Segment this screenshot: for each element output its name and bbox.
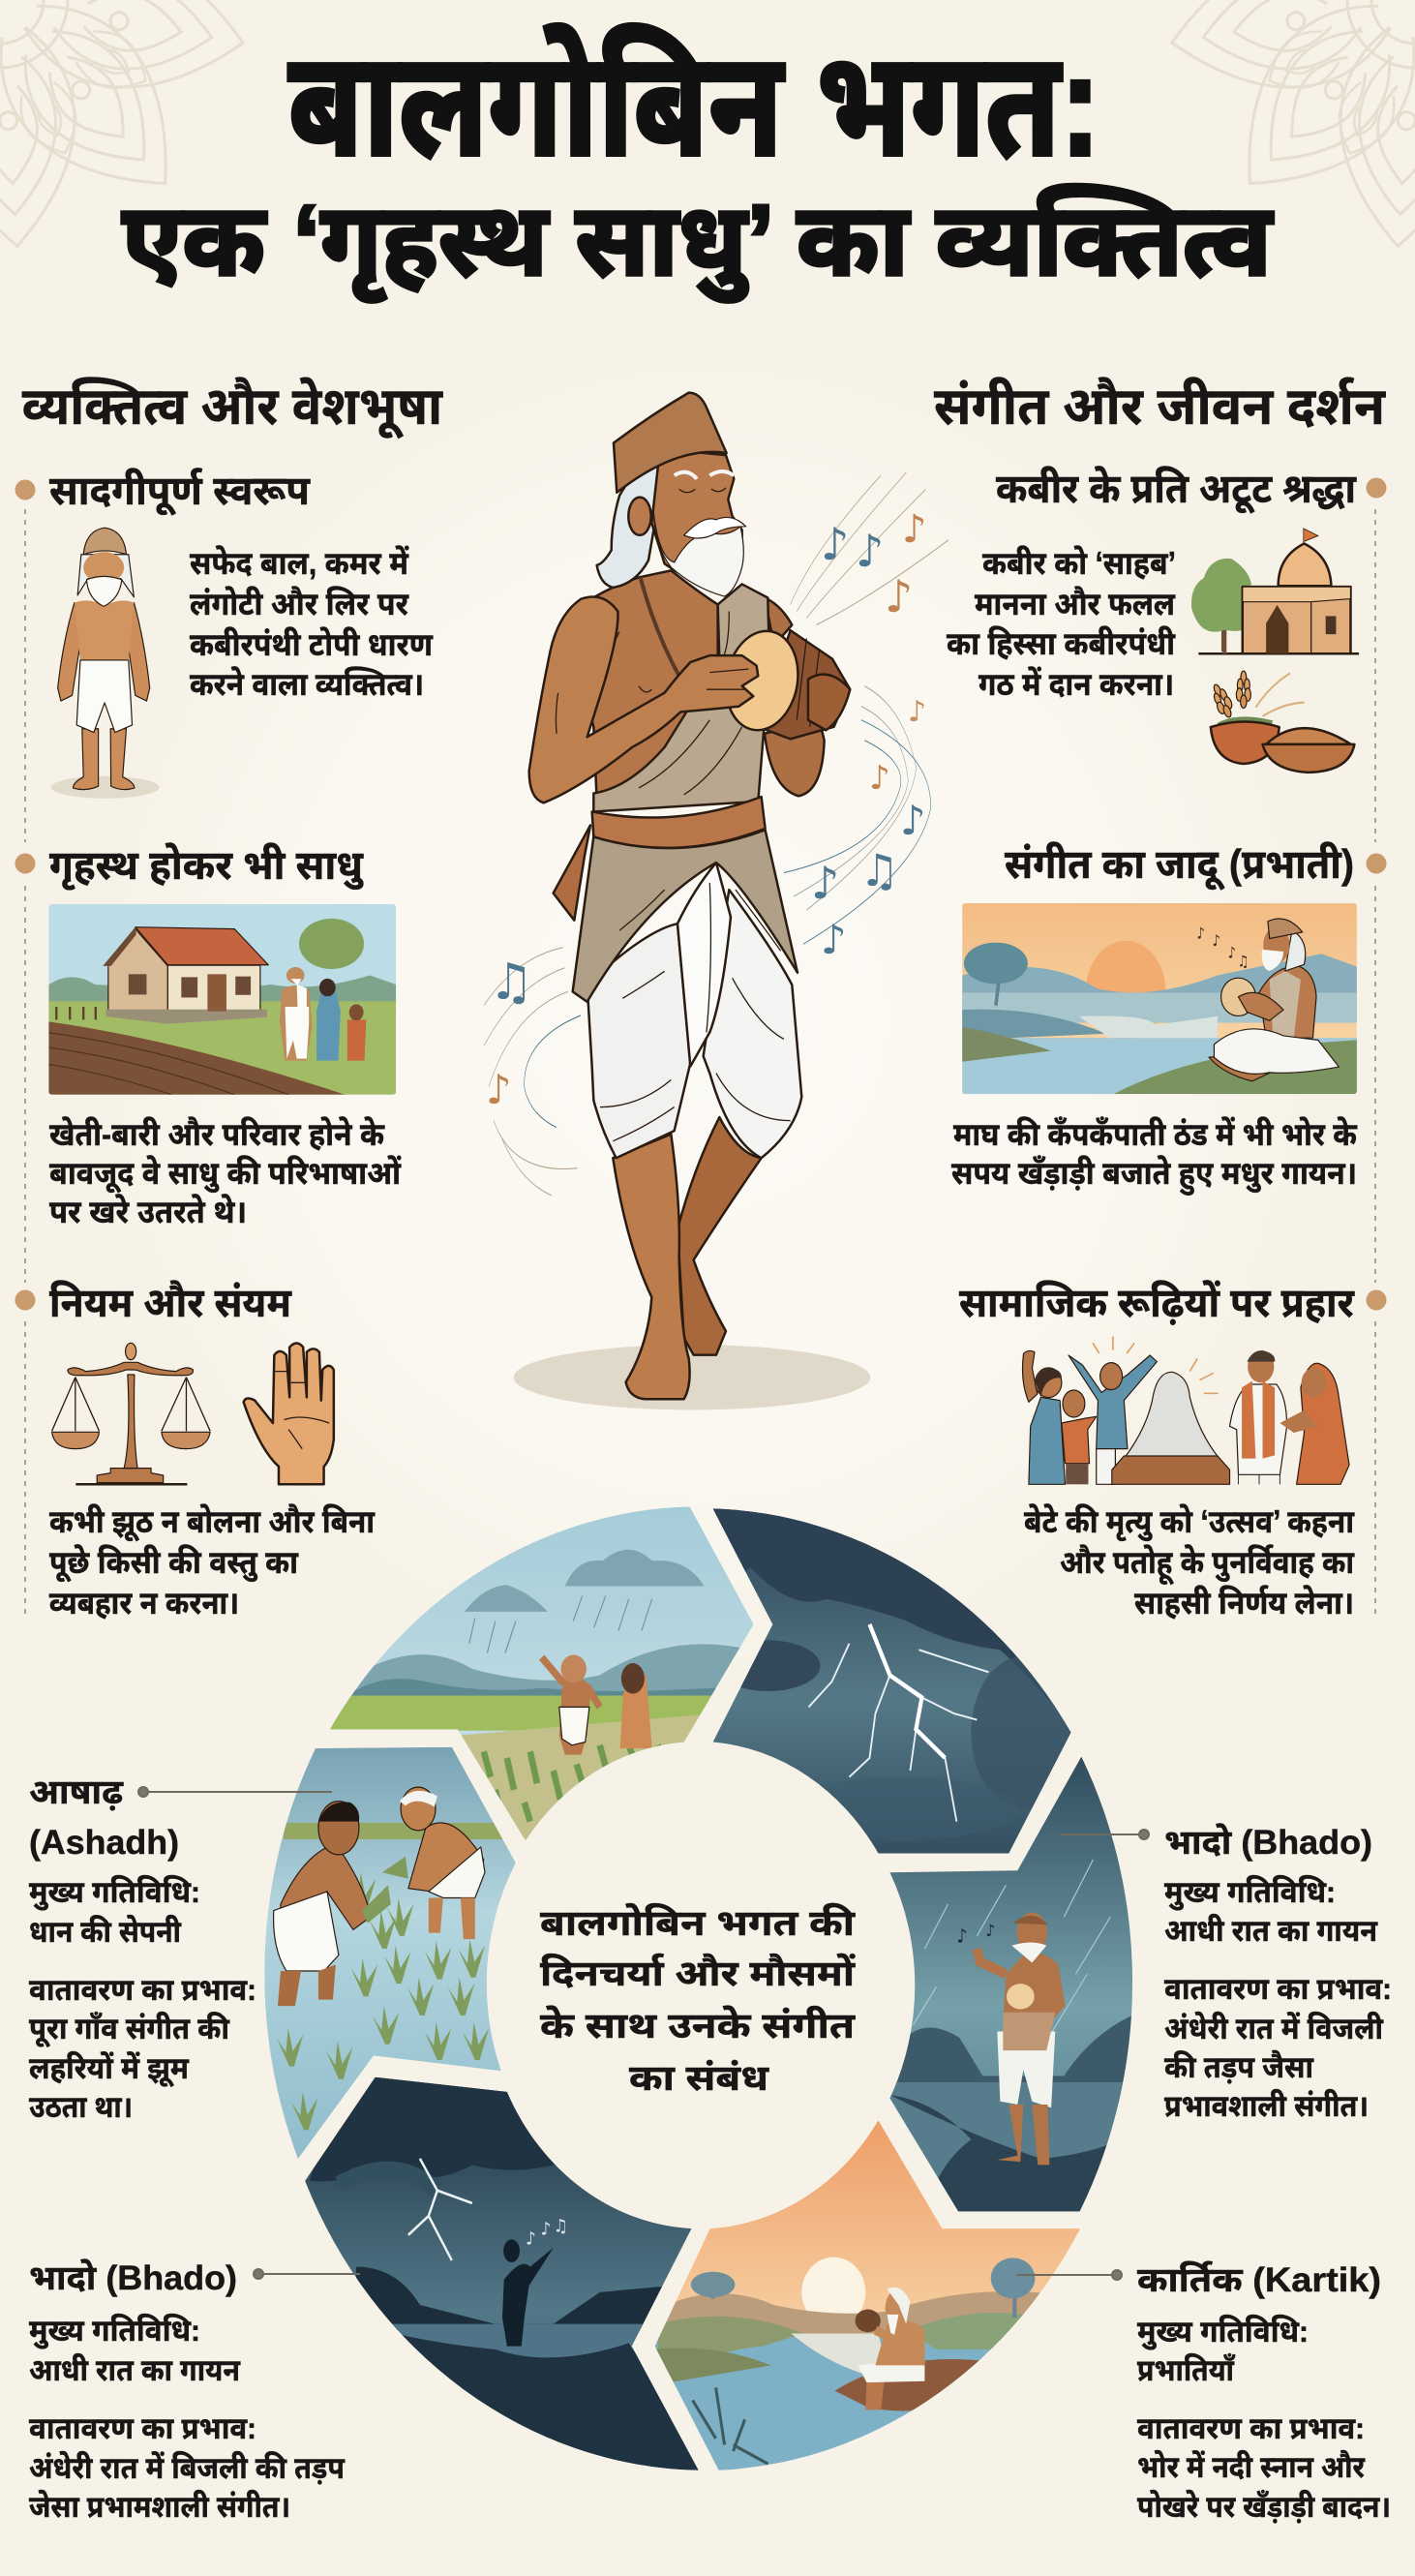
- text: householder sage: [49, 1115, 402, 1229]
- label: Ashadh: लहरियों में झूम: [29, 2051, 190, 2087]
- heading: music column: संगीत और जीवन दर्शन: [934, 377, 1387, 436]
- music notes around figure: ♪: [811, 857, 839, 909]
- label: Bhado right: मुख्य गतिविधि:: [1164, 1875, 1336, 1911]
- drum: [723, 621, 850, 740]
- wheel centre text: के साथ उनके संगीत: [540, 2005, 856, 2046]
- label: Bhado right: की तड़प जैसा: [1164, 2050, 1314, 2084]
- label: Bhado left: [29, 2258, 346, 2524]
- label: Bhado left: अंधेरी रात में बिजली की तड़प: [29, 2451, 346, 2485]
- text: magic of music: माघ की कँपकँपाती ठंड में भी भोर के: [953, 1115, 1358, 1152]
- icon: scales and raised hand: [52, 1343, 334, 1484]
- music notes around figure: ♪: [869, 759, 890, 798]
- text: devotion to Kabir: [947, 545, 1176, 702]
- label: Bhado right: भादो (Bhado): [1164, 1823, 1372, 1862]
- label: Kartik: वातावरण का प्रभाव:: [1137, 2411, 1365, 2445]
- label: Ashadh: उठता था।: [29, 2090, 133, 2124]
- label: Bhado left: मुख्य गतिविधि:: [29, 2314, 200, 2349]
- face: [651, 452, 742, 594]
- label: Bhado right: वातावरण का प्रभाव:: [1164, 1972, 1392, 2006]
- leader lines: [138, 1787, 1149, 2280]
- label: Kartik: कार्तिक (Kartik): [1137, 2260, 1381, 2299]
- segment: midnight singer: [884, 1751, 1139, 2216]
- wheel centre text: का संबंध: [629, 2058, 770, 2098]
- label: Bhado right: आधी रात का गायन: [1164, 1914, 1378, 1948]
- beard: [653, 509, 743, 596]
- music notes around figure: ♫: [489, 954, 534, 1012]
- label: Ashadh: धान की सेपनी: [29, 1915, 182, 1949]
- wheel centre text: [540, 1902, 856, 2098]
- mandala top left: [0, 0, 255, 251]
- label: Bhado left: भादो (Bhado): [29, 2258, 237, 2297]
- sacred bead necklace: [641, 577, 679, 676]
- left timeline: [15, 480, 35, 1614]
- text: simple appearance: लंगोटी और लिर पर: [190, 586, 409, 621]
- sash: [592, 797, 766, 848]
- subheading: magic of music: संगीत का जादू (प्रभाती): [1005, 841, 1354, 891]
- text: rules and restraint: व्यबहार न करना।: [48, 1585, 239, 1621]
- music notes around figure: ♫: [859, 844, 899, 896]
- music notes around figure: ♪: [486, 1066, 512, 1113]
- subheading: attack on social customs: सामाजिक रूढ़ियों पर प्रहार: [959, 1280, 1355, 1325]
- label: Kartik: मुख्य गतिविधि:: [1137, 2315, 1309, 2350]
- music notes around figure: ♪: [900, 797, 926, 844]
- label: Ashadh: वातावरण का प्रभाव:: [29, 1973, 256, 2007]
- seasonal wheel: [260, 1491, 1139, 2483]
- text: rules and restraint: पूछे किसी की वस्तु का: [49, 1543, 299, 1583]
- mandala top right: [1160, 0, 1415, 251]
- icon: temple and tree: [1191, 529, 1359, 653]
- text: devotion to Kabir: मानना और फलल: [975, 586, 1176, 621]
- music notes around figure: ♪: [885, 570, 913, 622]
- label: Ashadh: पूरा गाँव संगीत की: [29, 2012, 230, 2047]
- wheel centre text: बालगोबिन भगत की: [540, 1902, 856, 1943]
- icon: standing sage: [51, 528, 159, 799]
- segment: night singer silhouette: ♫: [554, 2217, 568, 2237]
- back leg: [677, 1117, 762, 1355]
- music notes around figure: ♪: [821, 916, 847, 963]
- segment: rice transplanting: [260, 1745, 522, 2165]
- label: Ashadh: मुख्य गतिविधि:: [29, 1875, 200, 1911]
- text: simple appearance: [190, 544, 434, 702]
- text: magic of music: [951, 1115, 1358, 1196]
- text: householder sage: बावजूद वे साधु की परिभाषाओं: [49, 1154, 402, 1194]
- music notes around figure: ♪: [821, 518, 849, 570]
- text: simple appearance: करने वाला व्यक्तित्व।: [190, 665, 424, 702]
- text: simple appearance: सफेद बाल, कमर में: [190, 544, 409, 581]
- text: devotion to Kabir: गठ में दान करना।: [978, 666, 1174, 702]
- title: [122, 23, 1274, 302]
- subheading: simple appearance: सादगीपूर्ण स्वरूप: [49, 468, 311, 516]
- segment: lightning storm: [712, 1508, 1070, 1853]
- seated sage: ♪: [1197, 924, 1205, 943]
- right timeline: [1367, 478, 1386, 1614]
- text: attack on social customs: [1024, 1502, 1355, 1621]
- seated sage: [1197, 919, 1339, 1081]
- label: Ashadh: [29, 1773, 256, 2124]
- icon: grain offering: [1209, 671, 1354, 773]
- hair: [597, 464, 660, 588]
- segment: midnight singer: ♪: [985, 1921, 995, 1940]
- label: Bhado right: अंधेरी रात में विजली: [1164, 2012, 1384, 2046]
- label: Bhado left: आधी रात का गायन: [29, 2353, 241, 2387]
- upper cloth: [593, 584, 769, 811]
- text: rules and restraint: कभी झूठ न बोलना और बिना: [49, 1503, 376, 1542]
- text: magic of music: सपय खँड़ाड़ी बजाते हुए मधुर गायन।: [951, 1154, 1357, 1196]
- segment: night singer silhouette: [305, 2077, 699, 2470]
- seated sage: ♪: [1228, 944, 1236, 962]
- heading: personality column: व्यक्तित्व और वेशभूषा: [21, 377, 443, 439]
- segment: rain over fields: [330, 1506, 753, 1841]
- label: Ashadh: आषाढ़: [29, 1773, 124, 1811]
- title: एक ‘गृहस्थ साधु’ का व्यक्तित्व: [122, 184, 1274, 302]
- segment: midnight singer: ♪: [956, 1925, 968, 1948]
- music notes around figure: ♪: [856, 525, 884, 577]
- label: Bhado right: [1164, 1823, 1392, 2123]
- far shoulder and forearm: [765, 597, 825, 796]
- text: householder sage: पर खरे उतरते थे।: [49, 1193, 247, 1229]
- label: Ashadh: (Ashadh): [29, 1824, 179, 1862]
- segment: dawn river: [652, 2114, 1087, 2483]
- seated sage: ♪: [1213, 932, 1220, 951]
- title: बालगोबिन भगत:: [288, 23, 1100, 186]
- near arm and hand: [529, 596, 758, 803]
- text: attack on social customs: बेटे की मृत्यु को ‘उत्सव’ कहना: [1024, 1502, 1355, 1542]
- label: Bhado left: जेसा प्रभामशाली संगीत।: [29, 2490, 290, 2524]
- text: attack on social customs: साहसी निर्णय लेना।: [1134, 1584, 1354, 1621]
- segment: night singer silhouette: ♪: [526, 2229, 536, 2250]
- dhoti: [587, 863, 801, 1158]
- lower cloth: [573, 830, 798, 1002]
- music notes around figure: [486, 507, 927, 1113]
- front leg: [613, 1135, 690, 1399]
- text: devotion to Kabir: का हिस्सा कबीरपंधी: [947, 625, 1176, 661]
- label: Kartik: प्रभातियाँ: [1137, 2353, 1236, 2387]
- text: householder sage: खेती-बारी और परिवार होने के: [49, 1115, 385, 1152]
- text: simple appearance: कबीरपंथी टोपी धारण: [190, 626, 434, 662]
- illustration: sage at dawn by river: [962, 903, 1357, 1094]
- segment: night singer silhouette: ♪: [541, 2220, 551, 2240]
- illustration: house and family: [48, 904, 396, 1095]
- label: Kartik: पोखरे पर खँड़ाड़ी बादन।: [1137, 2490, 1391, 2524]
- subheading: householder sage: गृहस्थ होकर भी साधु: [49, 842, 364, 891]
- central figure: Balgobin Bhagat with drum: [484, 393, 948, 1409]
- text: devotion to Kabir: कबीर को ‘साहब’: [982, 545, 1176, 581]
- torso: [564, 570, 718, 802]
- label: Kartik: भोर में नदी स्नान और: [1137, 2450, 1366, 2484]
- label: Bhado right: प्रभावशाली संगीत।: [1164, 2089, 1369, 2123]
- music staff swirls: [484, 472, 948, 1196]
- label: Bhado left: वातावरण का प्रभाव:: [29, 2411, 256, 2445]
- ground shadow: [514, 1345, 870, 1409]
- text: rules and restraint: [48, 1503, 376, 1621]
- subheading: devotion to Kabir: कबीर के प्रति अटूट श्रद्धा: [996, 466, 1357, 514]
- wheel centre text: दिनचर्या और मौसमों: [540, 1953, 856, 1993]
- seated sage: ♫: [1238, 953, 1249, 971]
- subheading: rules and restraint: नियम और संयम: [49, 1280, 292, 1325]
- illustration: villagers and covered body: [1022, 1337, 1349, 1484]
- music notes around figure: ♪: [908, 695, 926, 729]
- cap: [614, 393, 727, 493]
- label: Kartik: [1137, 2260, 1391, 2524]
- text: attack on social customs: और पतोहू के पुनर्विवाह का: [1060, 1543, 1355, 1586]
- music notes around figure: ♪: [902, 507, 927, 552]
